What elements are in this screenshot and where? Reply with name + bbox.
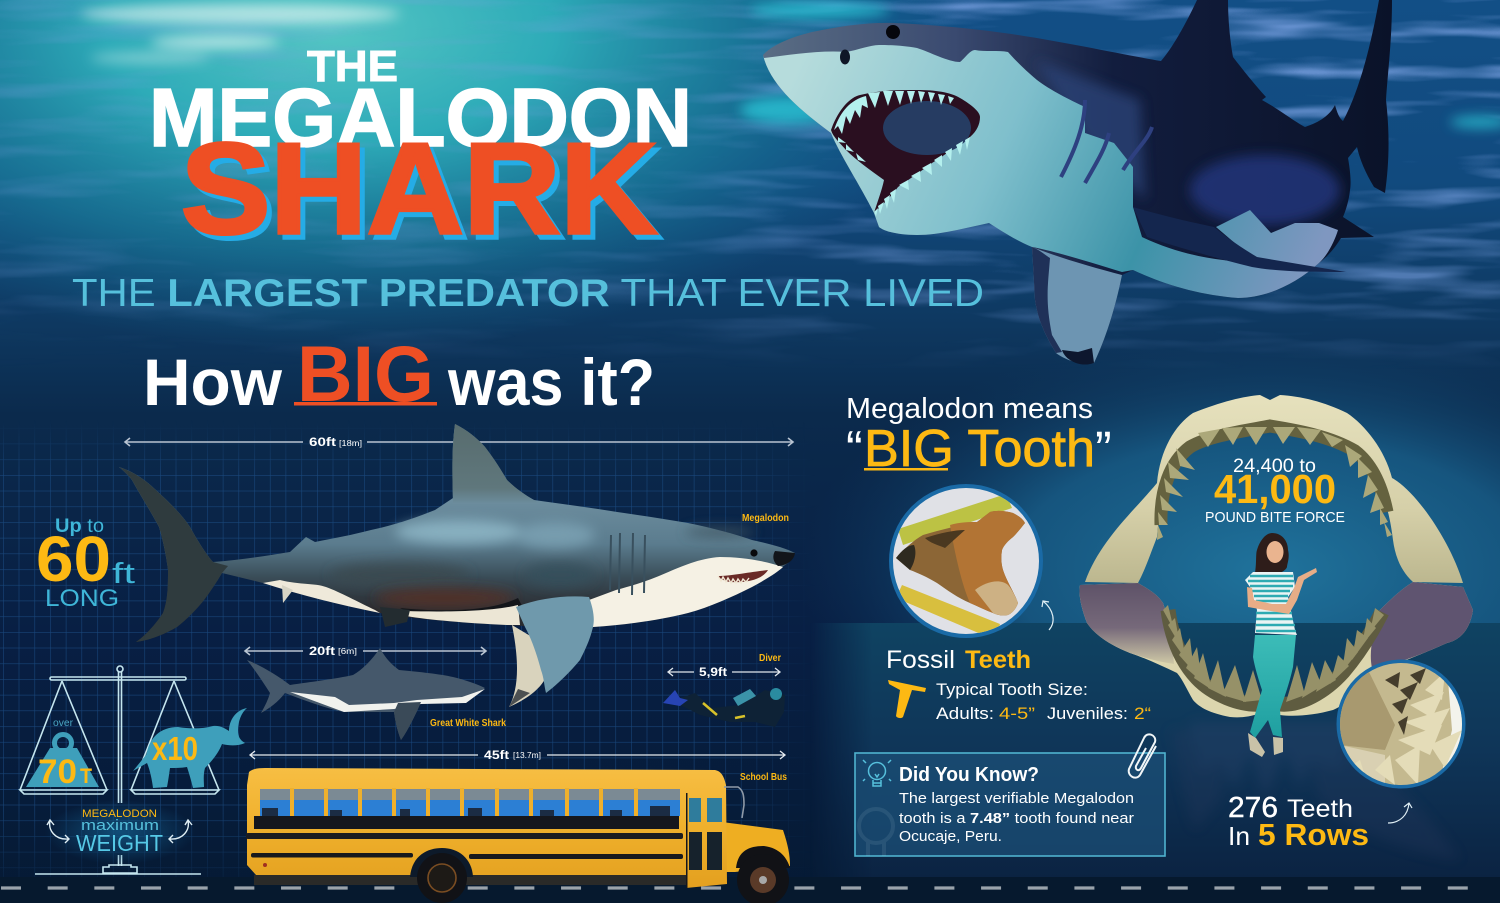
- photo: rows of teeth: [1339, 660, 1470, 790]
- measure: 45ft: 45ft: [484, 748, 509, 762]
- measure: 20ft: [245, 644, 486, 658]
- measure: 45ft: [250, 748, 785, 762]
- chart: balance scale weight comparison: [20, 666, 247, 874]
- stat: up to 60ft long: ft: [112, 558, 135, 590]
- text: fossil teeth: Teeth: [965, 646, 1031, 674]
- callout: did you know: The largest verifiable Megalodon: [899, 790, 1134, 807]
- label: school bus: School Bus: [740, 772, 787, 783]
- callout: did you know: tooth is a 7.48” tooth found near: [899, 810, 1134, 827]
- text: 276 teeth in 5 rows: In: [1228, 821, 1250, 851]
- icon: elephant times ten: [133, 708, 247, 788]
- text: bite force: 41,000: [1214, 466, 1336, 512]
- measure: diver: [668, 653, 781, 679]
- heading: how big was it: How: [143, 345, 283, 419]
- measure: 60ft: [125, 435, 793, 449]
- illustration: megalodon side view: [119, 424, 795, 707]
- heading: big tooth: “: [846, 421, 863, 477]
- icon: 70 ton weight: 70: [38, 753, 77, 791]
- label: megalodon: Megalodon: [742, 513, 789, 524]
- stat: up to 60ft long: Up to: [55, 516, 104, 537]
- heading: big tooth: BIG Tooth: [864, 420, 1095, 478]
- heading: how big was it: [143, 329, 655, 419]
- caption: megalodon maximum weight: WEIGHT: [76, 830, 163, 856]
- icon: 70 ton weight: T: [80, 765, 92, 788]
- text: bite force: POUND BITE FORCE: [1205, 510, 1345, 526]
- measure: diver: 5,9ft: [699, 665, 727, 679]
- arrow: to teeth photo: [1388, 803, 1412, 823]
- heading: how big was it: BIG: [297, 329, 434, 418]
- heading: big tooth: [846, 393, 1112, 478]
- callout: did you know: Did You Know?: [899, 764, 1039, 786]
- illustration: megalodon swimming top right: [763, 0, 1392, 365]
- illustration: jaw reflection: [1170, 722, 1460, 860]
- illustration: diver: [663, 688, 785, 727]
- callout: did you know: [855, 753, 1165, 856]
- text: typical tooth size: Adults:: [936, 705, 994, 723]
- measure: 20ft: 20ft: [309, 644, 335, 658]
- measure: 60ft: 60ft: [309, 435, 336, 449]
- stat: up to 60ft long: LONG: [45, 585, 119, 612]
- illustration: school bus: [246, 768, 790, 903]
- icon: paperclip: [1129, 734, 1156, 778]
- measure: 20ft: [6m]: [338, 647, 357, 656]
- title: MEGALODON: [149, 71, 692, 164]
- measure: 60ft: [18m]: [339, 438, 362, 448]
- text: 276 teeth in 5 rows: 5 Rows: [1258, 817, 1369, 852]
- icon: tooth ruler hammer: [888, 680, 926, 718]
- title: [149, 42, 692, 266]
- title: SHARK: [181, 117, 657, 261]
- text: 276 teeth in 5 rows: Teeth: [1287, 795, 1353, 823]
- arrow: to fossil photo: [1042, 601, 1053, 630]
- text: typical tooth size: 4-5”: [999, 705, 1035, 723]
- icon: 70 ton weight: [26, 718, 99, 791]
- text: typical tooth size: Juveniles:: [1047, 705, 1128, 723]
- road with dashes: [0, 877, 1500, 903]
- text: 276 teeth in 5 rows: 276: [1228, 792, 1278, 824]
- heading: big tooth: Megalodon means: [846, 393, 1093, 425]
- title: SHARK: [186, 122, 662, 266]
- lower teeth: [1163, 605, 1384, 702]
- subtitle: THE LARGEST PREDATOR THAT EVER LIVED: [72, 272, 984, 315]
- illustration: shark jaws: [1079, 395, 1473, 717]
- text: 276 teeth in 5 rows: [1228, 792, 1369, 852]
- measure: diver: Diver: [759, 653, 781, 664]
- text: fossil teeth: [886, 646, 1031, 674]
- heading: how big was it: was it?: [447, 345, 655, 419]
- icon: 70 ton weight: over: [53, 718, 74, 729]
- text: bite force: 24,400 to: [1233, 456, 1316, 477]
- text: typical tooth size: 2“: [1134, 705, 1151, 723]
- upper teeth: [1157, 427, 1392, 540]
- text: fossil teeth: Fossil: [886, 646, 955, 674]
- title: THE: [307, 42, 398, 91]
- text: bite force: [1205, 456, 1345, 526]
- caption: megalodon maximum weight: [45, 800, 195, 864]
- figure: woman for scale: [1245, 533, 1317, 757]
- measure: 45ft: [13.7m]: [513, 751, 541, 760]
- text: typical tooth size: [936, 681, 1151, 723]
- heading: big tooth: ”: [1095, 421, 1112, 477]
- caption: megalodon maximum weight: maximum: [81, 817, 159, 834]
- callout: did you know: Ocucaje, Peru.: [899, 828, 1002, 845]
- stat: up to 60ft long: [36, 516, 135, 612]
- photo: fossil tooth: [891, 486, 1041, 640]
- caption: megalodon maximum weight: MEGALODON: [82, 808, 157, 820]
- text: typical tooth size: Typical Tooth Size:: [936, 681, 1088, 699]
- stat: up to 60ft long: 60: [36, 523, 111, 595]
- label: great white shark: Great White Shark: [430, 718, 506, 729]
- illustration: great white shark: [247, 648, 485, 740]
- icon: elephant times ten: x10: [152, 730, 198, 767]
- icon: light bulb: [863, 760, 891, 786]
